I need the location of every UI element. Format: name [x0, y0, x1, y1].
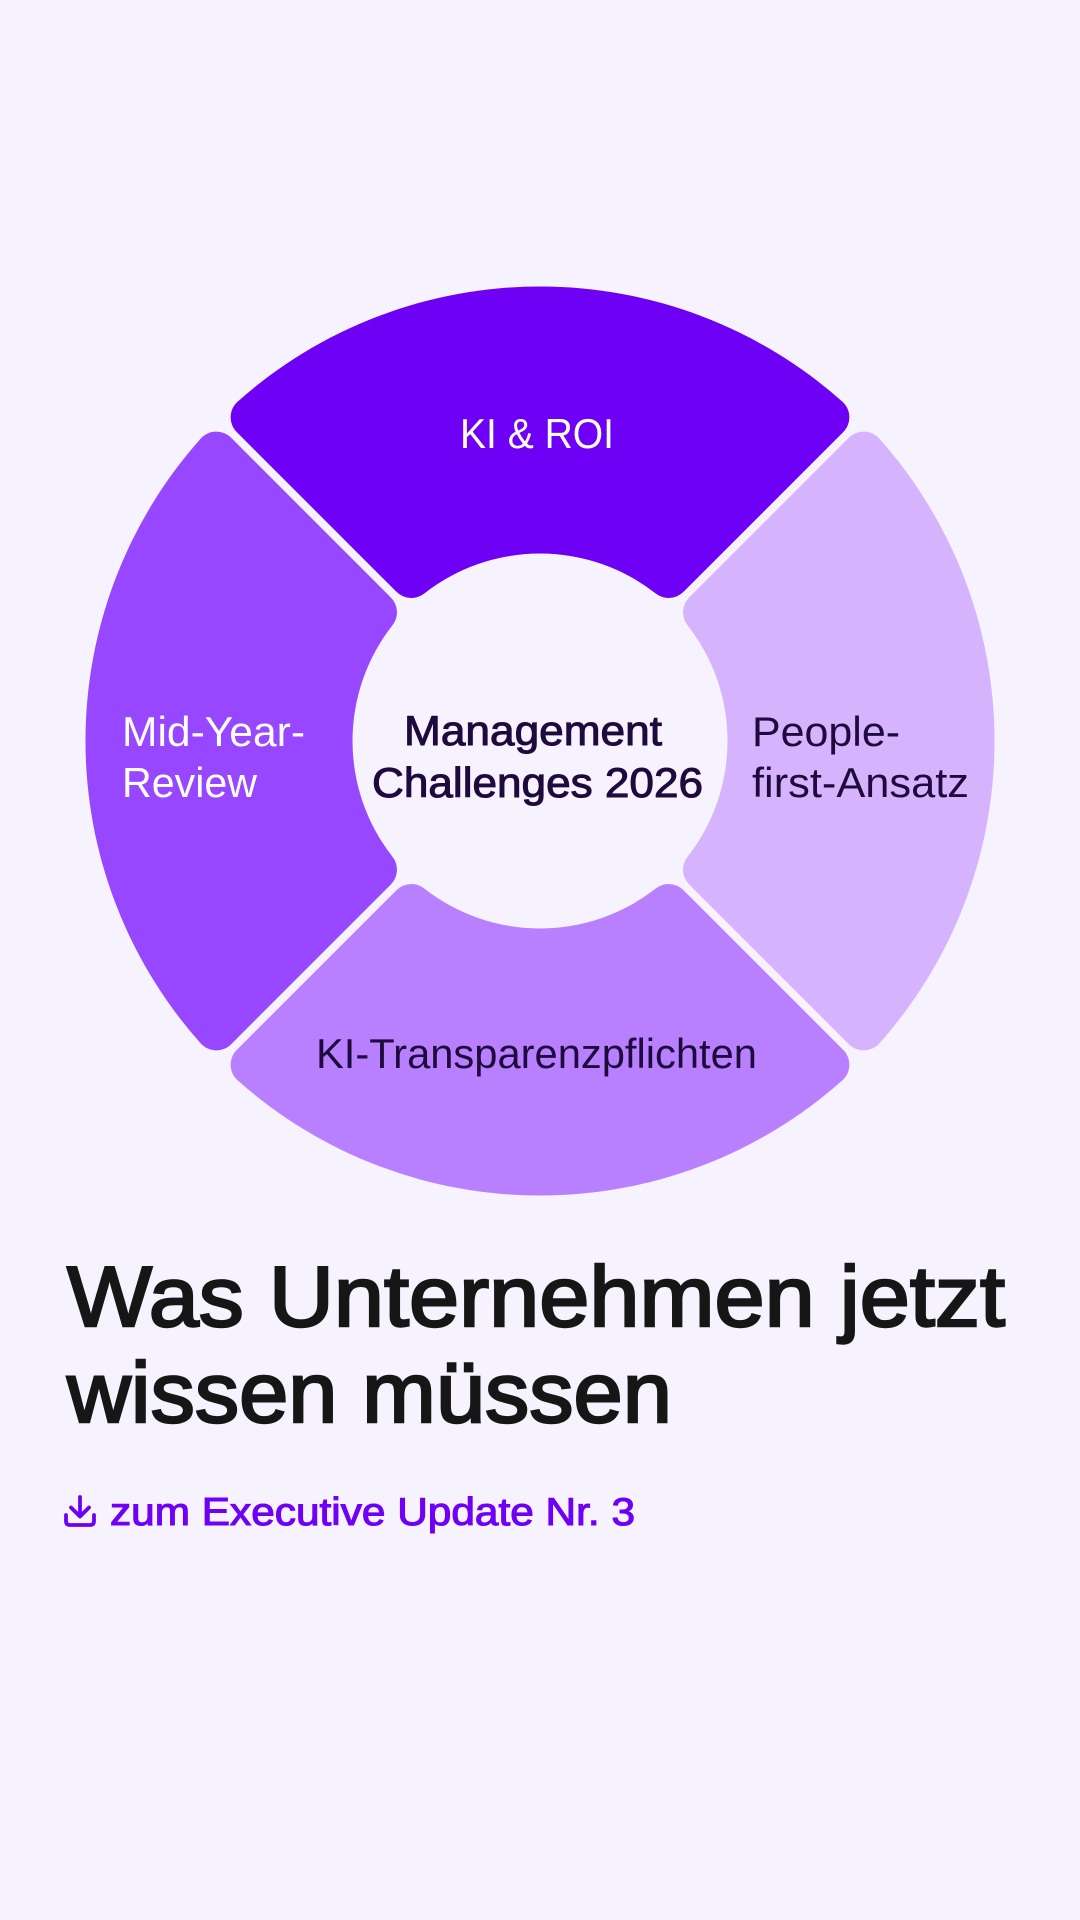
- segment: People-first-Ansatz: first-Ansatz: [752, 759, 969, 806]
- segment: KI & ROI: [231, 286, 849, 598]
- segment: KI-Transparenzpflichten: [231, 884, 849, 1196]
- donut diagram: [85, 286, 995, 1196]
- heading: [66, 1250, 1005, 1441]
- heading: wissen müssen: [66, 1346, 672, 1441]
- segment: KI-Transparenzpflichten: KI-Transparenzpflichten: [316, 1030, 757, 1077]
- segment: People-first-Ansatz: People-: [752, 708, 900, 755]
- center label: Challenges 2026: [372, 759, 703, 806]
- link text: zum Executive Update Nr. 3: [110, 1491, 635, 1534]
- segment: KI & ROI: KI & ROI: [460, 410, 614, 457]
- heading: Was Unternehmen jetzt: [67, 1250, 1005, 1345]
- segment: Mid-Year-Review: [85, 432, 397, 1050]
- center label: [372, 707, 703, 806]
- icon: download: [66, 1497, 94, 1525]
- segment: People-first-Ansatz: [683, 432, 995, 1050]
- segment: Mid-Year-Review: Mid-Year-: [122, 708, 305, 755]
- download link: [66, 1491, 635, 1534]
- center label: Management: [404, 707, 662, 754]
- segment: Mid-Year-Review: Review: [122, 759, 258, 806]
